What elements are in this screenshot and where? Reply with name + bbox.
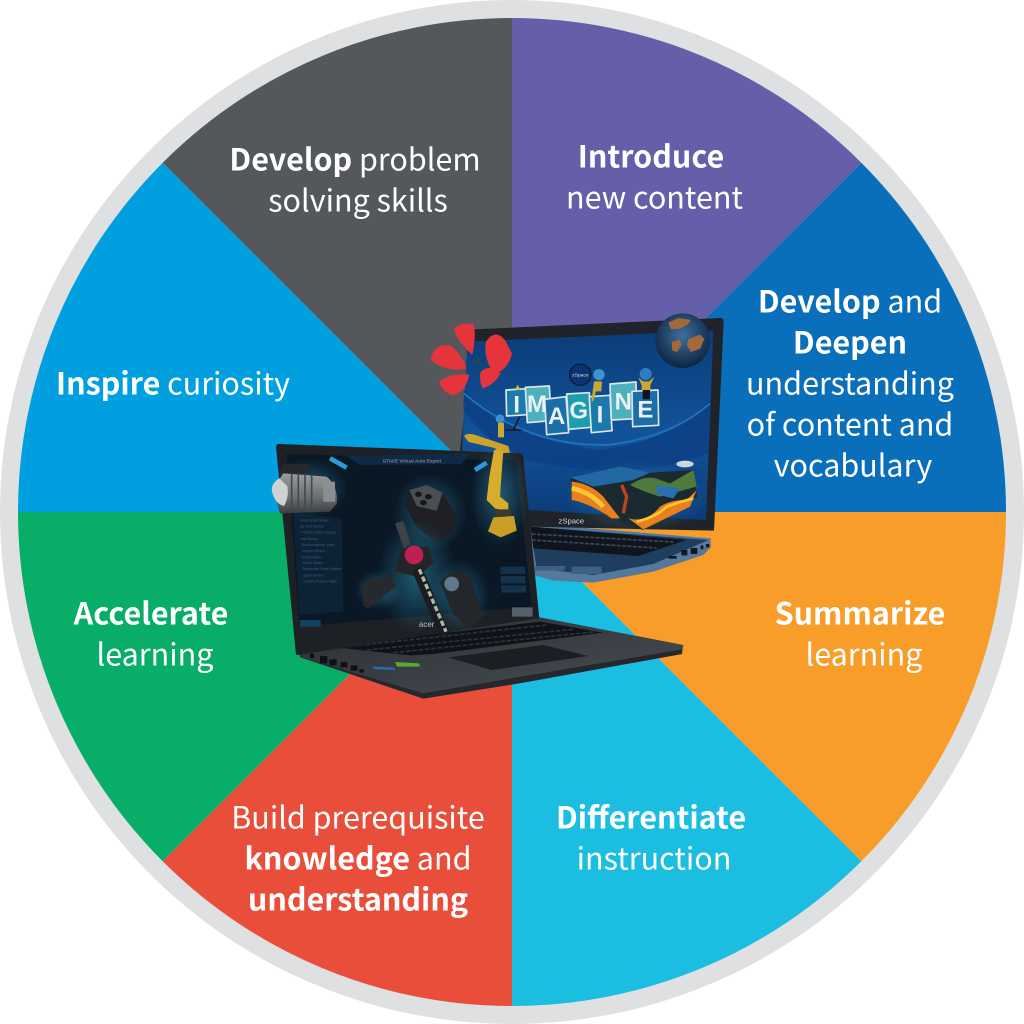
left menu [293, 513, 343, 615]
left menu: Hall Sensor [301, 537, 319, 541]
left menu: Small Spark Sensor [300, 519, 330, 523]
text: introduce: Introduce [578, 132, 724, 176]
magnifier figure: zSpace [572, 372, 589, 378]
left menu: Spark Sensor [303, 574, 324, 578]
panel: introduce [512, 18, 861, 512]
keyboard [328, 622, 603, 655]
panel: inspire [18, 163, 512, 512]
panel: develop problem solving [163, 18, 512, 512]
left menu: Electromagnetic Valve [301, 543, 334, 547]
gear housing [430, 560, 490, 633]
electric motor [265, 458, 348, 518]
screen heading: GTAFE Virtual Auto Expert [383, 459, 442, 464]
text: develop and deepen: Deepen [793, 318, 907, 362]
left menu: Accelerator Pedal Position [303, 567, 342, 571]
IMAGINE tiles [506, 382, 659, 435]
text: accelerate: Accelerate [73, 590, 228, 634]
IMAGINE tiles: N [615, 388, 632, 415]
left menu: Throttle Position Sensor [301, 530, 337, 534]
panel: differentiate [512, 512, 861, 1006]
bracket part [355, 570, 402, 610]
IMAGINE tiles: I [597, 402, 603, 429]
flower petals [431, 324, 512, 395]
text: summarize: Summarize [775, 590, 945, 634]
panel: build knowledge [163, 512, 512, 1006]
text: differentiate: instruction [577, 834, 731, 878]
figure with laptop [496, 385, 522, 437]
text: differentiate: Differentiate [556, 794, 746, 838]
front laptop screen [287, 454, 532, 627]
left menu: Ice Flow Sensor [300, 525, 325, 529]
back laptop [460, 313, 724, 583]
left menu: Oxygen Sensor [302, 549, 326, 553]
text: develop and deepen: of content and [747, 400, 953, 444]
text: develop and deepen: understanding [746, 360, 954, 404]
right buttons [501, 567, 526, 593]
touchpad [448, 645, 588, 670]
text: build prerequisite knowledge: understanding [248, 876, 468, 920]
engine block [393, 473, 467, 553]
text: develop problem solving skills: solving skills [268, 176, 448, 220]
panel: develop and deepen [512, 163, 1006, 512]
figure on tile [638, 368, 654, 399]
laptops illustration [265, 313, 724, 699]
left menu: Knock Sensor [303, 561, 324, 565]
panel: accelerate [18, 512, 512, 861]
text: accelerate: learning [97, 630, 213, 674]
text: develop and deepen: vocabulary [774, 442, 932, 486]
magnifier figure [570, 364, 605, 401]
IMAGINE tiles: E [637, 396, 653, 423]
zSpace logo on bezel: zSpace [559, 517, 584, 526]
IMAGINE tiles: I [513, 392, 520, 419]
IMAGINE tiles: M [527, 391, 547, 418]
text: introduce: new content [566, 174, 743, 218]
text: inspire curiosity: Inspire curiosity [56, 360, 290, 404]
globe [655, 313, 710, 368]
suspension part [377, 520, 457, 635]
IMAGINE tiles: G [569, 398, 588, 425]
back laptop screen [462, 331, 713, 520]
IMAGINE tiles: A [548, 403, 565, 430]
acer logo: acer [419, 620, 435, 629]
front laptop lid [276, 444, 539, 655]
text: build prerequisite knowledge: Build prerequisite [231, 794, 485, 838]
back laptop lid [460, 318, 724, 531]
yellow robot arm [464, 434, 530, 547]
side ports and stickers [310, 653, 364, 673]
panel: summarize [512, 512, 1006, 861]
text: develop and deepen: Develop and [758, 278, 942, 322]
front laptop [265, 434, 683, 699]
left menu: Camera Position Valve [303, 579, 337, 583]
front laptop base [297, 617, 683, 699]
left menu: Starter Motor [302, 556, 322, 560]
back laptop base [530, 523, 711, 583]
text: build prerequisite knowledge: knowledge and [244, 834, 472, 878]
back laptop ports [668, 544, 709, 559]
earth cross-section [563, 460, 710, 533]
text: summarize: learning [806, 630, 922, 674]
text: develop problem solving skills: Develop problem [229, 136, 481, 180]
